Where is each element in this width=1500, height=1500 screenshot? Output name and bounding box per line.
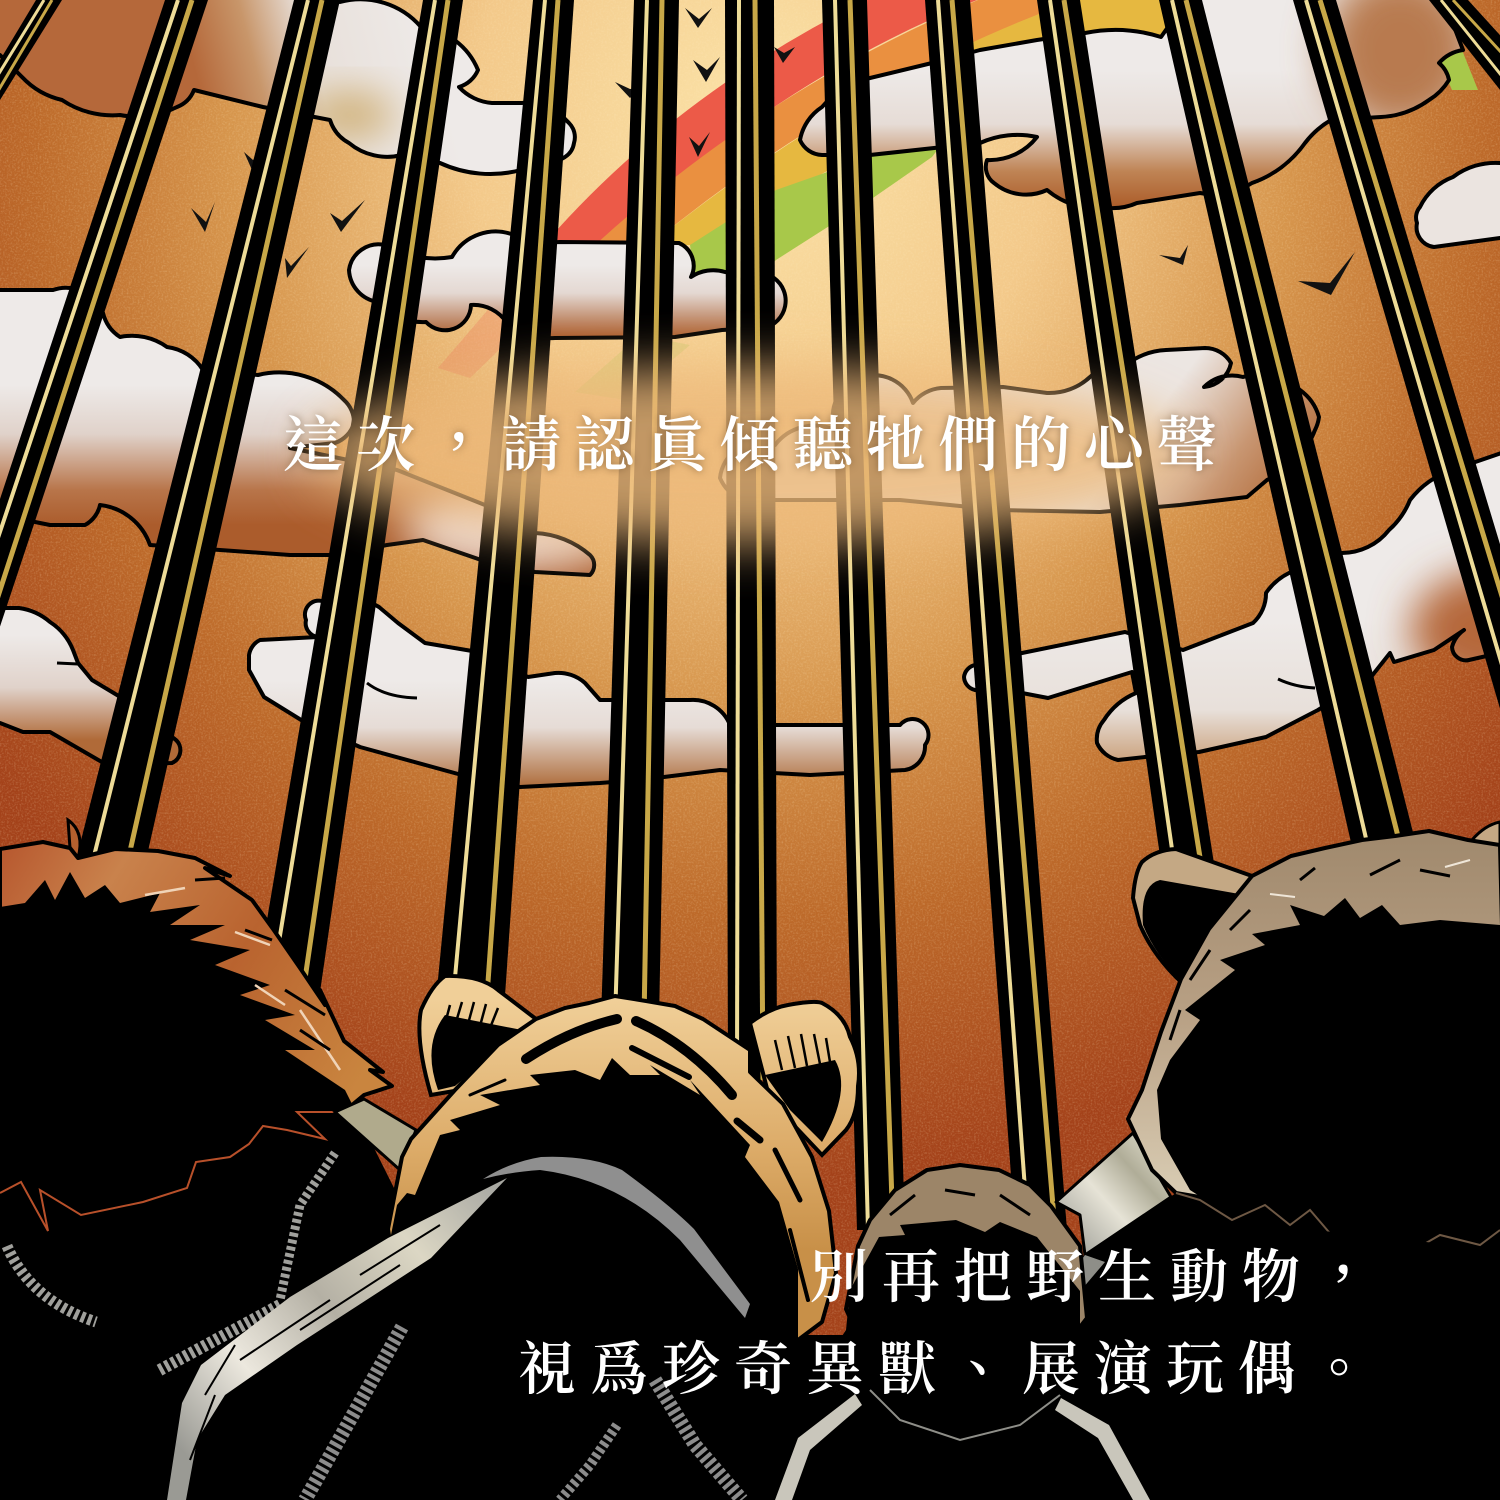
animal: lion, back view	[0, 820, 420, 1500]
heading: 這次，請認眞傾聽牠們的心聲	[283, 413, 1229, 479]
bar 10	[1037, 0, 1215, 870]
birds	[191, 8, 1355, 295]
closing text line 2: 視爲珍奇異獸、展演玩偶。	[518, 1337, 1382, 1402]
animal: bear, back view	[1128, 822, 1500, 1300]
animal: tiger, back view	[380, 976, 859, 1500]
bar 7	[725, 0, 777, 1080]
bar 4	[250, 0, 463, 1020]
bear far ear	[1472, 822, 1500, 850]
cloud: lower centre	[249, 598, 928, 787]
bar 3	[76, 0, 340, 860]
bear ear	[1133, 849, 1252, 990]
cloud: top left	[0, 0, 575, 174]
cloud: lower right	[964, 450, 1500, 760]
bar 6	[601, 0, 679, 1020]
bar 8	[822, 0, 905, 1230]
bar 5	[435, 0, 574, 1010]
animal arm: lion, grey strip	[7, 1099, 416, 1371]
closing text line 1: 別再把野生動物，	[810, 1245, 1386, 1310]
tiger left ear	[419, 976, 536, 1095]
bar 13	[1429, 0, 1500, 100]
base shadow	[0, 1193, 1500, 1500]
cloud: large left	[0, 288, 625, 575]
bar 2	[0, 0, 208, 750]
animal arm: tiger, large foreground	[167, 1157, 750, 1500]
bar 9	[925, 0, 1067, 1230]
animal: cub, back view	[775, 1165, 1150, 1500]
rainbow	[438, 0, 1478, 400]
cloud: centre right	[720, 348, 1319, 512]
cloud: top right	[800, 0, 1475, 209]
bar 1	[0, 0, 62, 150]
cloud: centre	[349, 231, 786, 338]
animal arm: bear	[1045, 1133, 1171, 1315]
tiger right ear	[750, 1002, 859, 1155]
cloud: lower left	[0, 608, 180, 765]
glow band behind heading	[310, 367, 1190, 543]
cloud: far right	[1416, 163, 1500, 247]
bar 12	[1293, 0, 1500, 760]
bar 11	[1159, 0, 1420, 860]
